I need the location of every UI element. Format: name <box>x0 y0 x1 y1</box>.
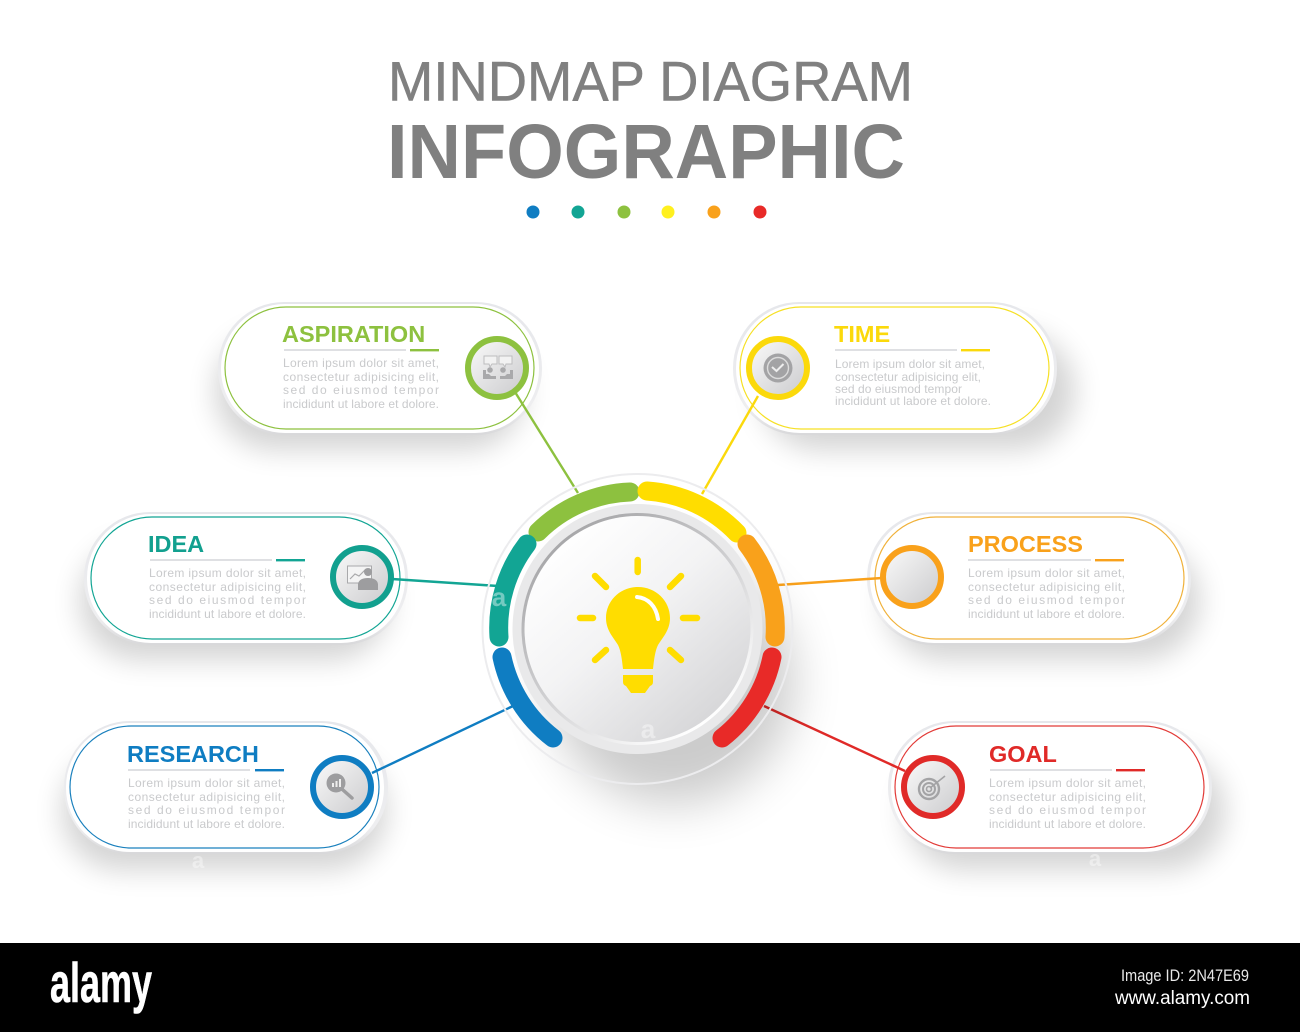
text block: research: incididunt ut labore et dolore. <box>128 817 285 831</box>
icon: clock <box>764 354 792 382</box>
title: MINDMAP DIAGRAM <box>388 50 913 112</box>
text block: aspiration <box>283 356 439 411</box>
heading: idea: IDEA <box>148 531 204 557</box>
text block: goal <box>989 776 1146 831</box>
panel: process <box>867 512 1200 660</box>
image id: Image ID: 2N47E69 <box>1121 966 1249 985</box>
heading: goal: GOAL <box>989 741 1057 767</box>
text block: idea <box>149 566 306 621</box>
central hub <box>482 474 794 804</box>
title: INFOGRAPHIC <box>387 109 905 195</box>
watermark marks: a <box>192 848 205 873</box>
text block: process: Lorem ipsum dolor sit amet, <box>968 566 1125 580</box>
title <box>387 50 913 195</box>
text block: aspiration: incididunt ut labore et dolore. <box>283 397 439 411</box>
ring segments <box>499 491 775 738</box>
panel: time <box>733 302 1075 450</box>
icon: presenter with chart <box>348 566 378 590</box>
text block: research: sed do eiusmod tempor <box>128 803 285 817</box>
heading: process: PROCESS <box>968 531 1083 557</box>
text block: time: sed do eiusmod tempor <box>835 382 962 396</box>
text block: aspiration: consectetur adipisicing elit, <box>283 370 439 384</box>
text block: research <box>128 776 285 831</box>
panel: research <box>62 721 388 870</box>
text block: idea: incididunt ut labore et dolore. <box>149 607 306 621</box>
text block: goal: Lorem ipsum dolor sit amet, <box>989 776 1146 790</box>
node: research <box>313 758 371 816</box>
heading: aspiration: ASPIRATION <box>282 321 425 347</box>
website: www.alamy.com <box>1114 988 1250 1009</box>
watermark marks: a <box>1089 846 1102 871</box>
text block: goal: incididunt ut labore et dolore. <box>989 817 1146 831</box>
watermark marks: a <box>641 714 656 744</box>
node: process <box>883 548 941 606</box>
icon: magnifier with bars <box>326 774 352 798</box>
heading: time: TIME <box>834 321 890 347</box>
text block: time: Lorem ipsum dolor sit amet, <box>835 357 985 371</box>
node: idea <box>333 548 391 606</box>
logo: alamy: alamy <box>50 951 152 1014</box>
watermark marks <box>192 582 1102 873</box>
text block: idea: Lorem ipsum dolor sit amet, <box>149 566 306 580</box>
text block: process: sed do eiusmod tempor <box>968 593 1125 607</box>
text block: goal: sed do eiusmod tempor <box>989 803 1146 817</box>
text block: time: incididunt ut labore et dolore. <box>835 394 991 408</box>
text block: aspiration: Lorem ipsum dolor sit amet, <box>283 356 439 370</box>
text block: time <box>835 357 991 408</box>
text block: aspiration: sed do eiusmod tempor <box>283 383 439 397</box>
node: aspiration <box>468 339 526 397</box>
footer bar <box>0 943 1300 1032</box>
text block: idea: sed do eiusmod tempor <box>149 593 306 607</box>
text block: time: consectetur adipisicing elit, <box>835 370 981 384</box>
heading: research: RESEARCH <box>127 741 259 767</box>
panel: aspiration <box>215 302 542 450</box>
text block: process: incididunt ut labore et dolore. <box>968 607 1125 621</box>
icon: light bulb <box>580 560 697 693</box>
icon: target <box>919 776 945 799</box>
connector lines <box>372 392 905 773</box>
text block: goal: consectetur adipisicing elit, <box>989 790 1146 804</box>
panel: idea <box>80 512 408 660</box>
watermark marks: a <box>492 582 507 612</box>
text block: process: consectetur adipisicing elit, <box>968 580 1125 594</box>
panel: goal <box>888 721 1225 870</box>
colour dots row <box>526 206 766 218</box>
text block: research: Lorem ipsum dolor sit amet, <box>128 776 285 790</box>
text block: process <box>968 566 1125 621</box>
text block: research: consectetur adipisicing elit, <box>128 790 285 804</box>
icon: people talking <box>483 356 513 379</box>
node: goal <box>904 758 962 816</box>
text block: idea: consectetur adipisicing elit, <box>149 580 306 594</box>
node: time <box>749 339 807 397</box>
